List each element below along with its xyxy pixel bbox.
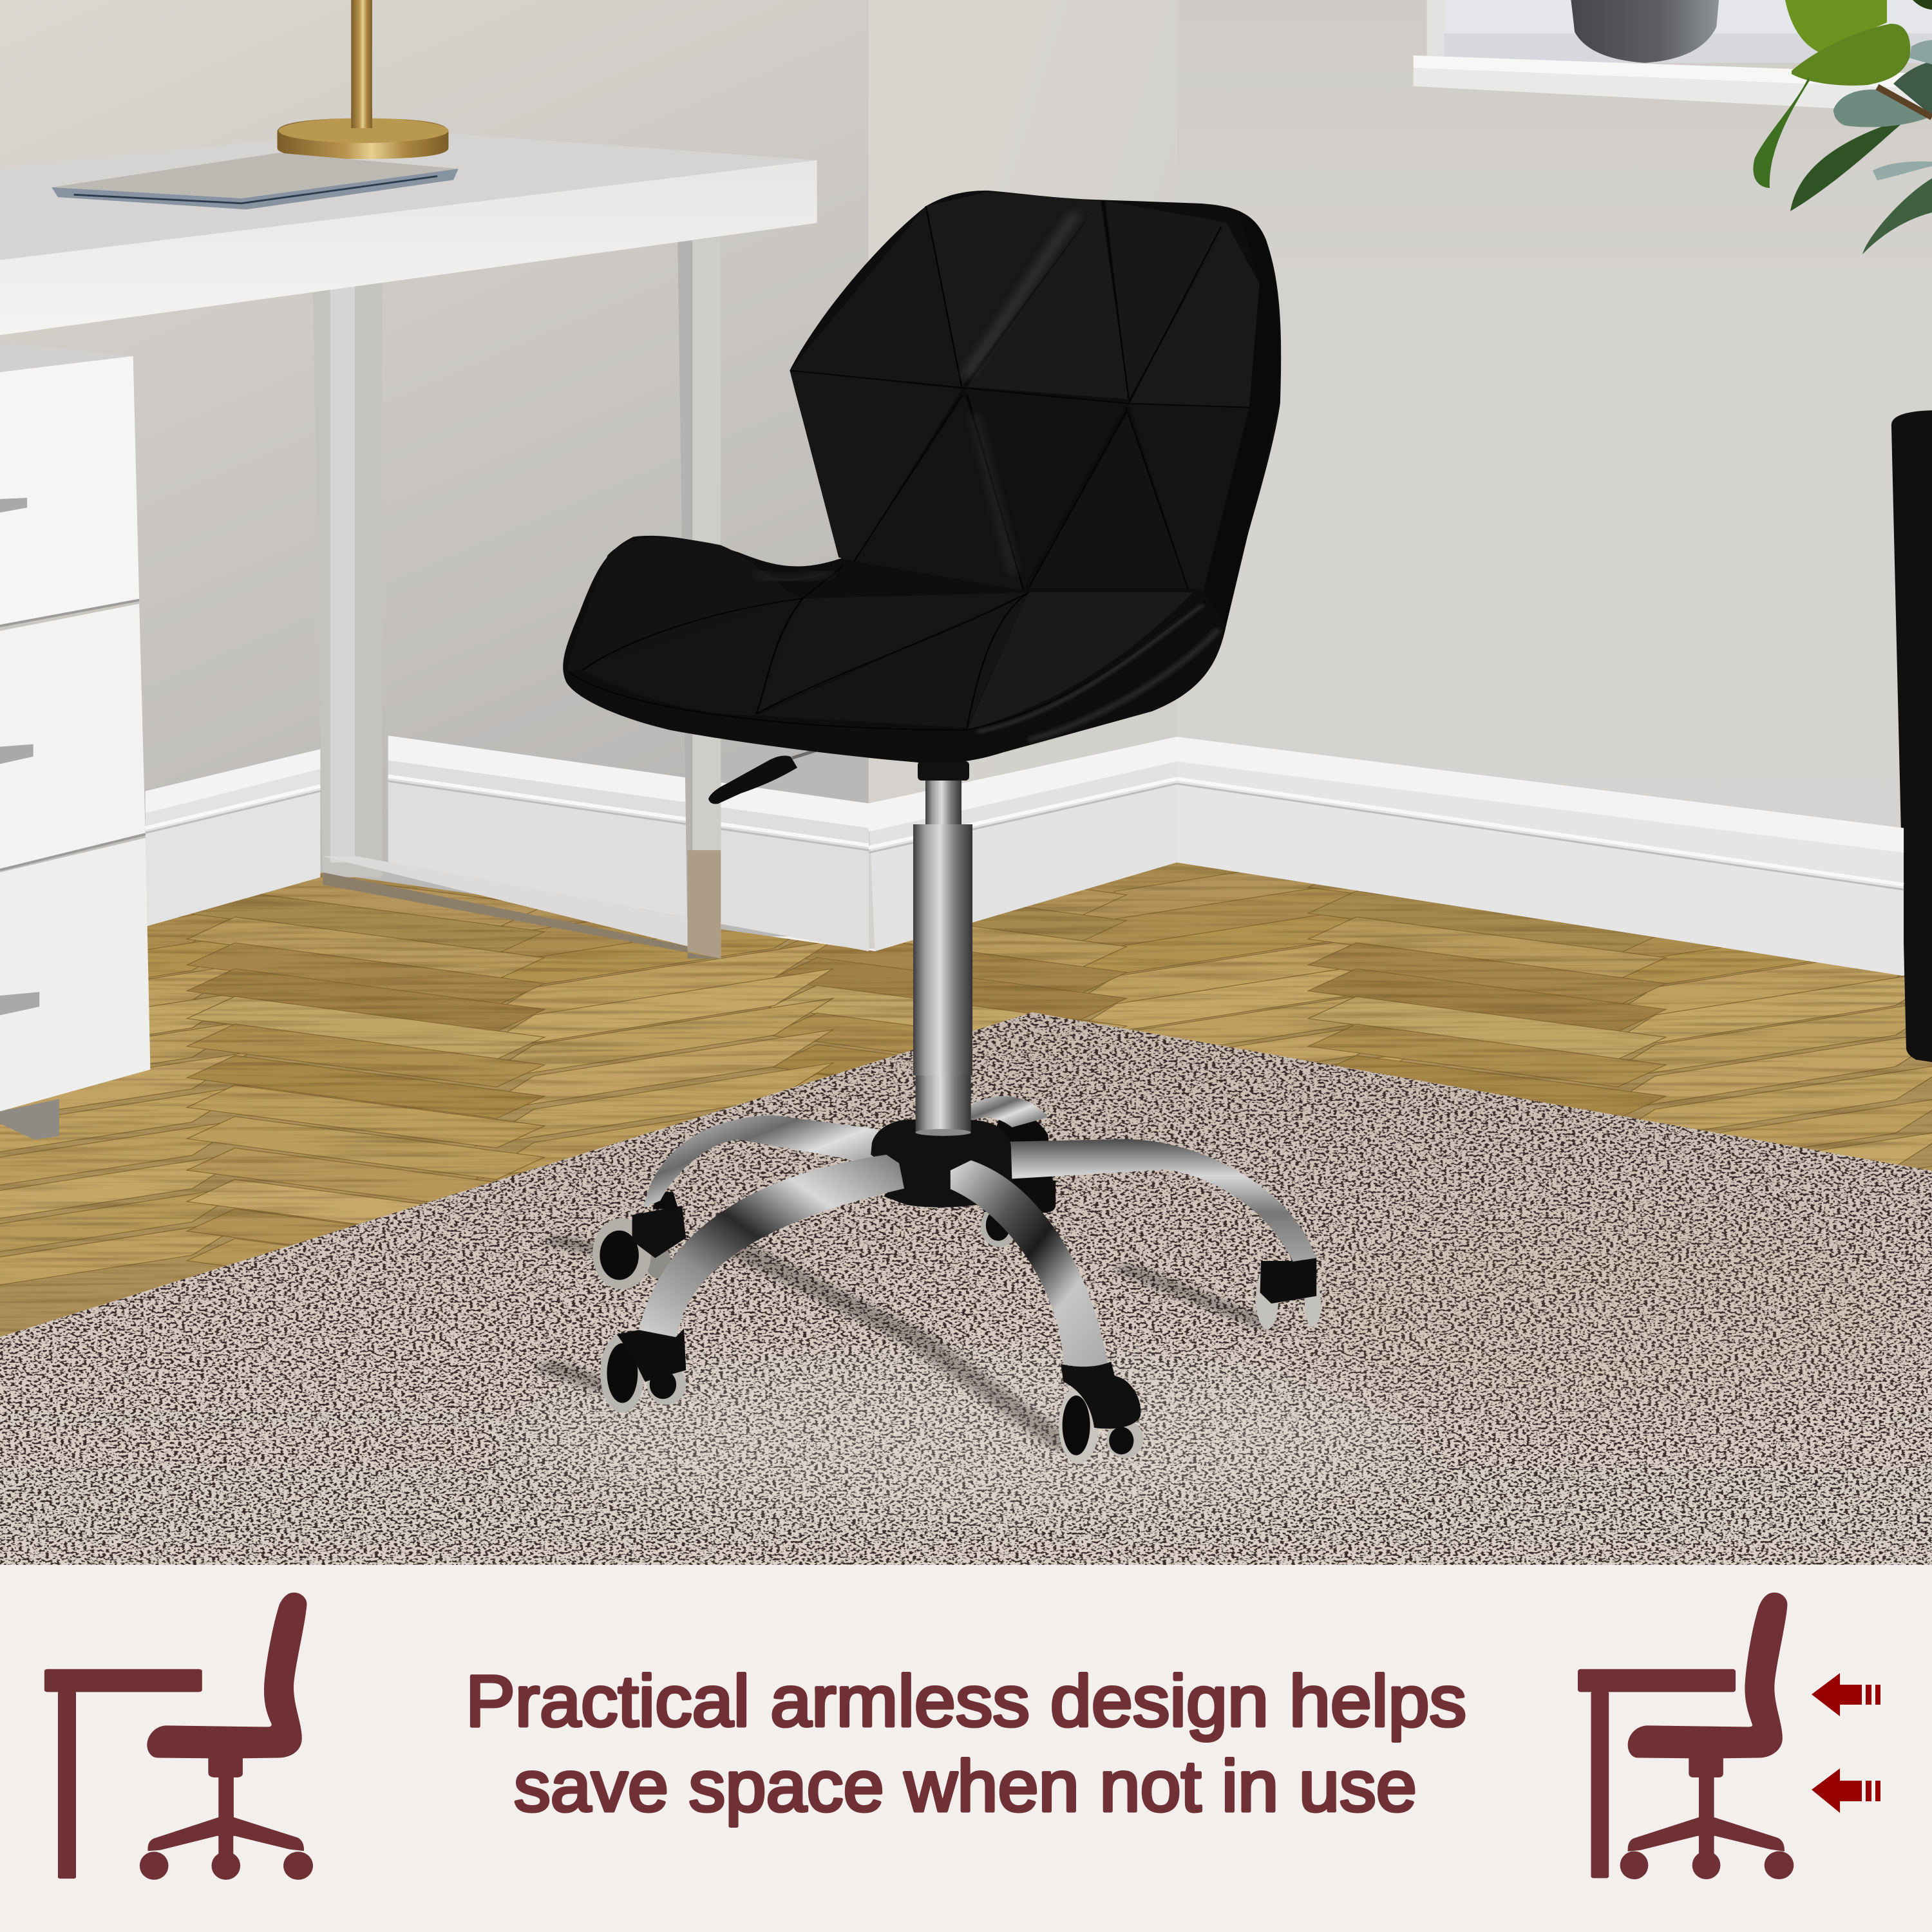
back panels — [790, 192, 1280, 625]
laptop — [52, 153, 459, 209]
right caster — [1256, 1241, 1321, 1329]
herringbone wood floor — [0, 862, 1932, 1337]
desk frame — [313, 236, 721, 959]
plant leaves — [1753, 0, 1932, 254]
leg front-left — [639, 1155, 904, 1338]
caster shadows on rug — [553, 1241, 1266, 1442]
back left caster — [592, 1192, 686, 1289]
chair back and seat silhouette — [563, 191, 1281, 763]
front left caster — [600, 1329, 686, 1413]
desk top — [0, 135, 817, 335]
back highlights — [967, 214, 1075, 572]
back quilting seams — [790, 201, 1249, 591]
baseboards — [146, 735, 1904, 976]
chair base assembly — [553, 1063, 1321, 1464]
chair shell — [563, 191, 1281, 763]
seat top panels — [567, 538, 1193, 730]
front right caster — [1059, 1361, 1144, 1464]
rug speckle texture — [0, 998, 1932, 1578]
back leg — [971, 1096, 1048, 1127]
caption text: Practical armless design helps — [466, 1661, 1466, 1741]
lamp — [277, 0, 448, 159]
leg front-right — [951, 1160, 1108, 1367]
dark bin — [1891, 410, 1932, 1062]
window with sill — [1414, 0, 1932, 113]
caption text — [466, 1661, 1466, 1826]
leg right — [1009, 1139, 1316, 1262]
wall: right section — [1177, 0, 1932, 986]
caption text: save space when not in use — [514, 1746, 1417, 1826]
back right caster — [981, 1110, 1056, 1247]
seat front rim sheen — [1028, 629, 1218, 740]
icon: desk and chair — [44, 1593, 313, 1880]
seat seams and piping — [569, 565, 1206, 730]
icon: desk and chair pushed in — [1578, 1593, 1794, 1879]
arrow: upper — [1812, 1673, 1880, 1716]
gas lift column — [913, 761, 972, 1075]
wall: pillar section — [869, 0, 1177, 949]
wall: left section — [0, 0, 869, 936]
vase — [1571, 0, 1719, 63]
left wing sheen — [757, 572, 833, 580]
hub — [871, 1120, 1012, 1208]
central column — [916, 1063, 971, 1133]
drawer cabinet — [0, 343, 150, 1140]
seat piping highlight — [977, 605, 1203, 732]
bottom strip — [0, 1565, 1932, 1932]
leg upper-left — [644, 1115, 878, 1208]
arrow: lower — [1812, 1768, 1880, 1813]
adjustment lever — [708, 750, 817, 804]
